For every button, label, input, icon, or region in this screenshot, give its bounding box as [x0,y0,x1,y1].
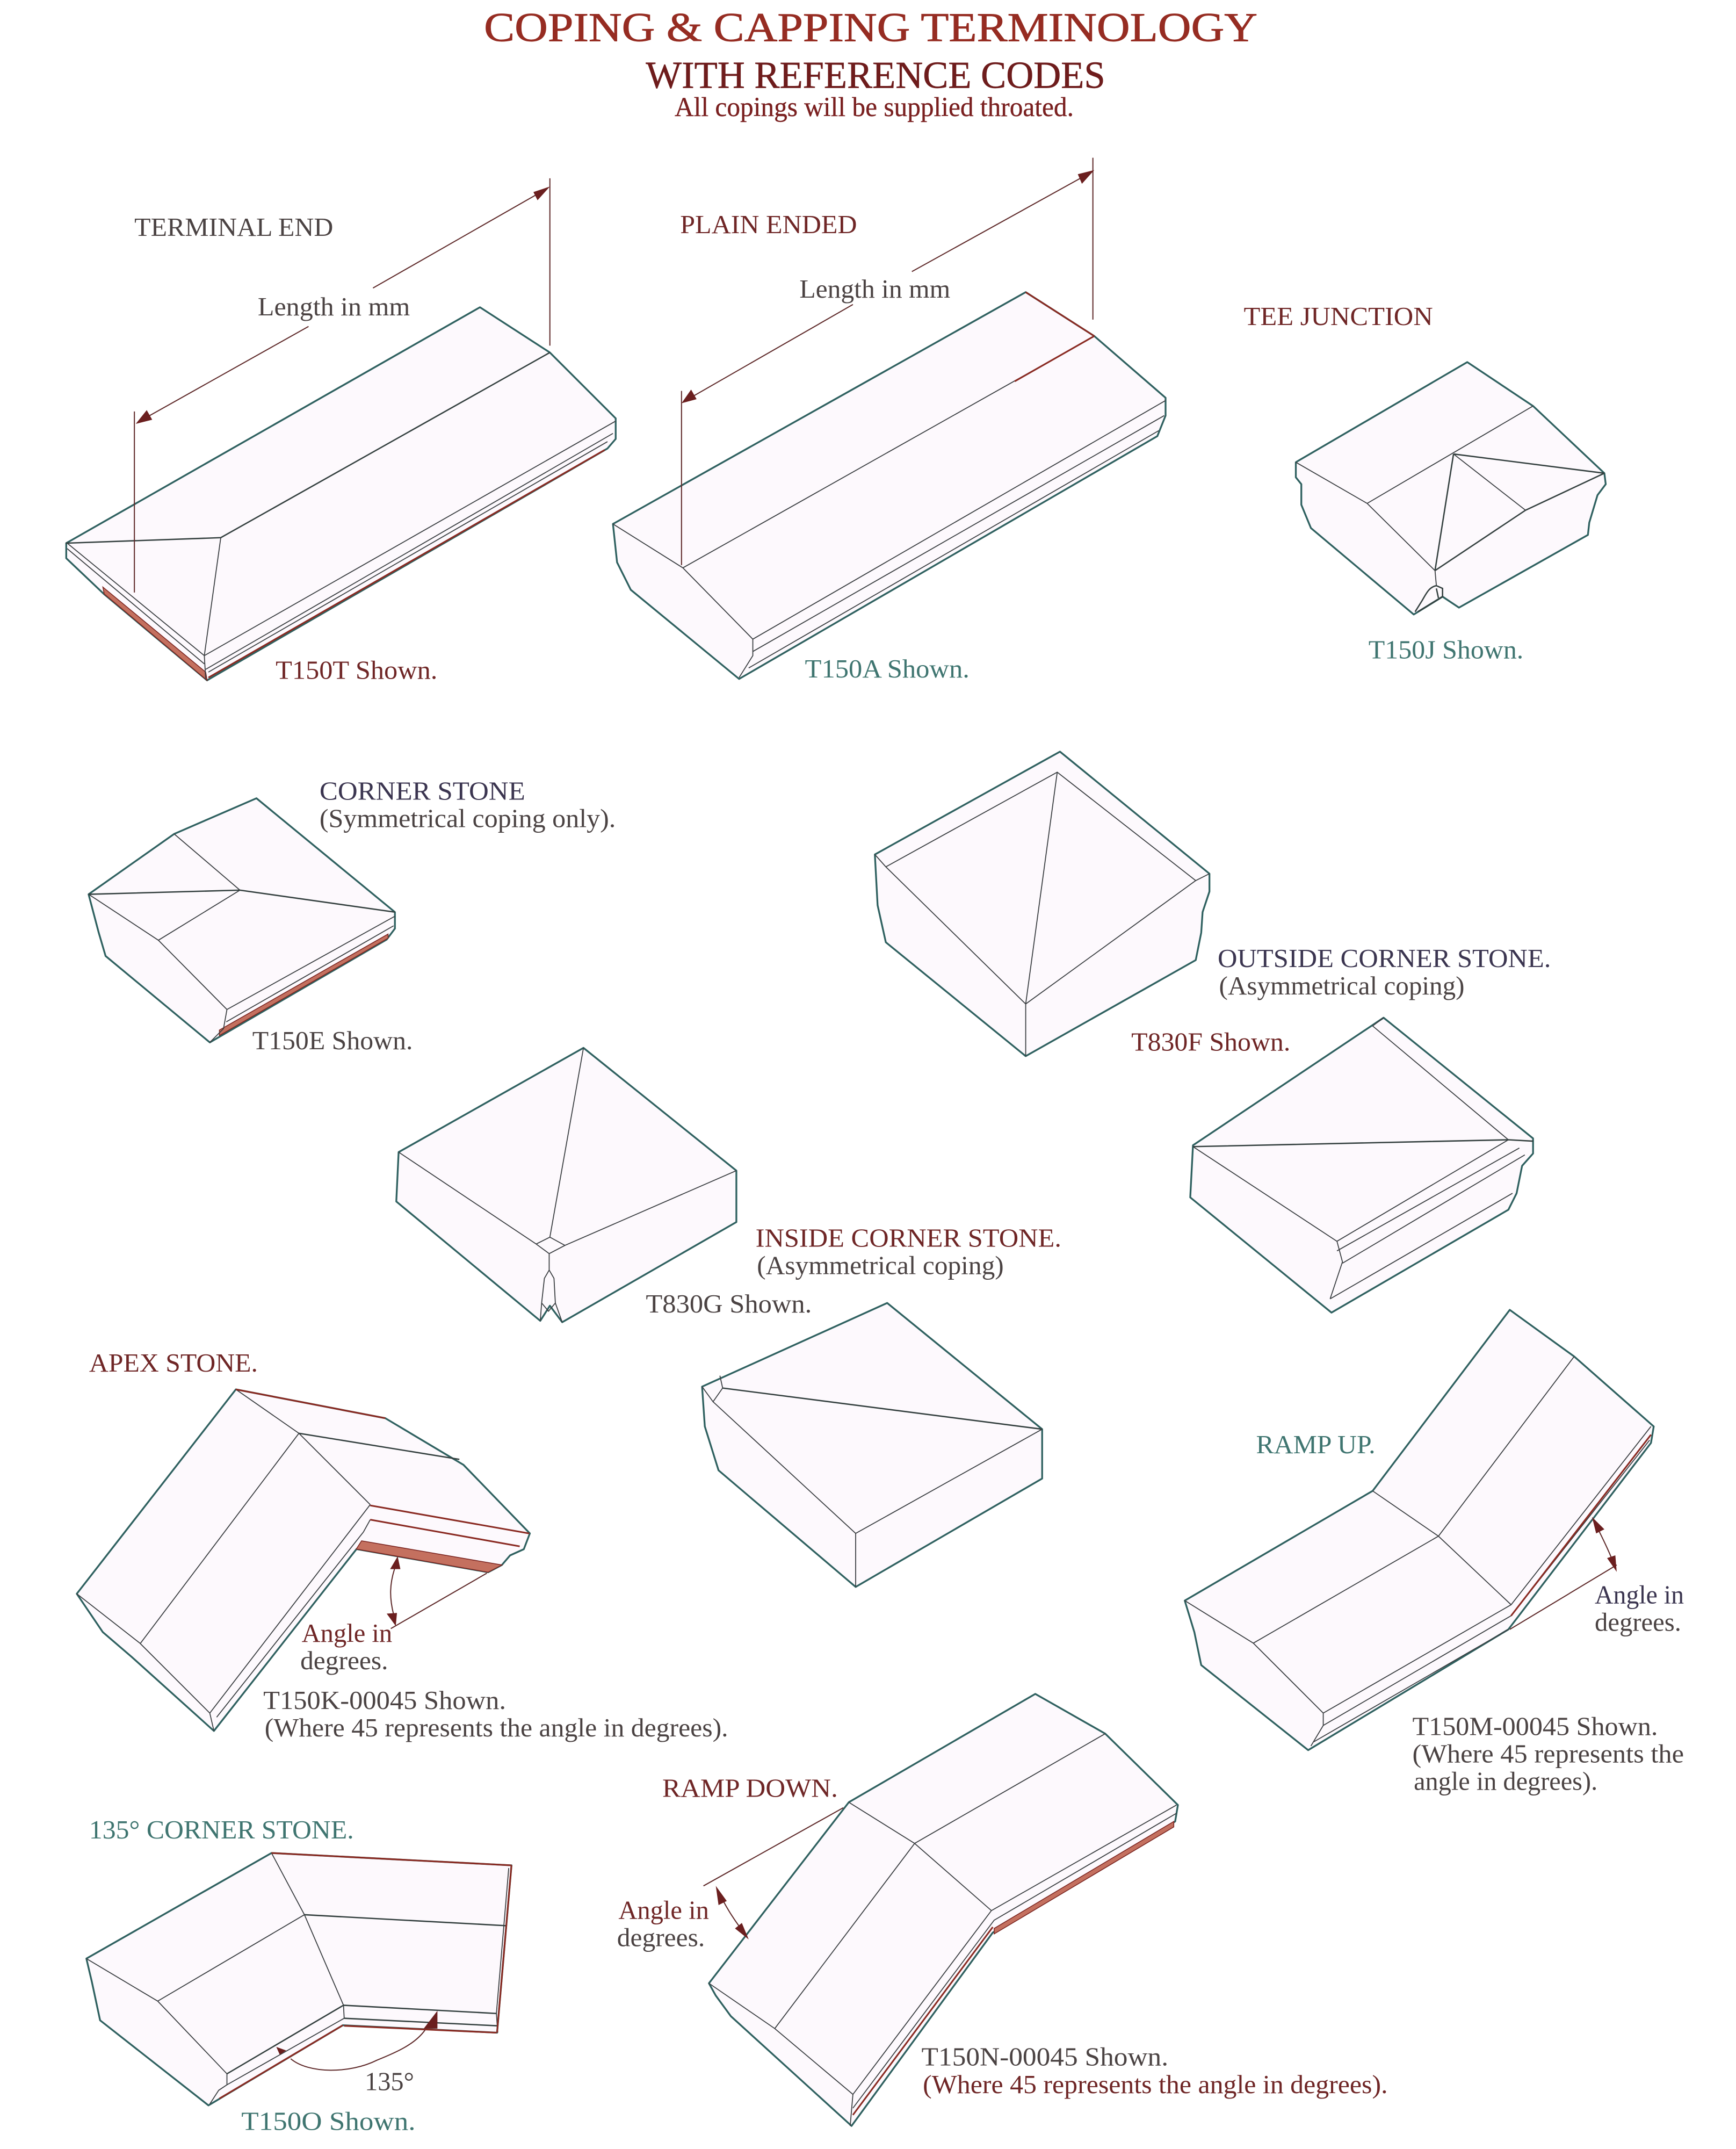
length label: Length in mm [799,275,950,304]
coping drawing [1185,1310,1654,1750]
angle dimension arrow [704,1808,843,1939]
coping drawing [613,292,1166,679]
heading: PLAIN ENDED [680,211,857,239]
reference code: T150O Shown. [241,2108,416,2136]
heading: CORNER STONE [320,777,525,805]
angle label, second line: degrees. [1595,1608,1681,1636]
reference code: T150K-00045 Shown. [263,1686,506,1715]
stone drawing, reverse view [1190,1018,1533,1313]
panel: terminal end [66,178,616,685]
angle label: Angle in [1595,1581,1684,1609]
panel: inside corner stone [396,1048,1061,1587]
coping drawing [77,1389,530,1731]
panel: apex stone [77,1349,728,1742]
angle arc with arrows [276,2011,437,2070]
heading: APEX STONE. [89,1349,258,1378]
reference code: T830F Shown. [1131,1028,1290,1057]
panel: ramp up [1185,1310,1684,1796]
title: COPING & CAPPING TERMINOLOGY [484,5,1257,51]
stone drawing with nosing [875,752,1210,1056]
subtitle: WITH REFERENCE CODES [646,54,1105,96]
angle label, second line: degrees. [617,1924,705,1952]
panel: ramp down [617,1694,1388,2126]
heading: RAMP DOWN. [662,1774,838,1802]
reference code: T150M-00045 Shown. [1413,1712,1658,1741]
note: All copings will be supplied throated. [675,92,1074,122]
note: (Symmetrical coping only). [320,804,616,833]
coping drawing [89,798,395,1042]
angle dimension arrow [1510,1517,1617,1629]
length dimension arrow [134,178,550,593]
heading: TEE JUNCTION [1244,302,1433,331]
title block [484,5,1257,122]
panel: 135 degree corner stone [86,1816,511,2136]
note: (Where 45 represents the angle in degrees). [265,1714,728,1742]
length label: Length in mm [258,293,410,321]
reference code: T150N-00045 Shown. [922,2043,1168,2072]
panel: plain ended [613,158,1166,683]
note: (Asymmetrical coping) [1219,972,1465,1000]
coping drawing [709,1694,1178,2126]
angle dimension arrow [387,1556,487,1628]
angle label: Angle in [618,1896,709,1925]
note, second line: angle in degrees). [1414,1768,1597,1796]
stone drawing, reverse view [702,1303,1042,1587]
coping drawing [1296,362,1605,615]
panel: outside corner stone [875,752,1551,1313]
note: (Asymmetrical coping) [757,1252,1004,1280]
stone drawing with throat [396,1048,736,1322]
length dimension arrow [682,158,1094,565]
angle label, second line: degrees. [300,1647,388,1675]
reference code: T830G Shown. [646,1290,812,1318]
heading: TERMINAL END [134,213,333,242]
panel: corner stone [89,777,616,1055]
reference code: T150J Shown. [1369,636,1523,664]
reference code: T150E Shown. [252,1027,413,1055]
panel: tee junction [1244,302,1605,664]
heading: OUTSIDE CORNER STONE. [1218,944,1551,973]
heading: RAMP UP. [1256,1431,1376,1459]
note: (Where 45 represents the angle in degrees). [923,2071,1388,2099]
coping drawing [86,1853,511,2105]
reference code: T150T Shown. [276,657,437,685]
note: (Where 45 represents the [1413,1740,1684,1769]
coping drawing [66,307,616,680]
heading: 135° CORNER STONE. [89,1816,354,1844]
reference code: T150A Shown. [805,655,970,683]
angle label: Angle in [302,1619,392,1648]
heading: INSIDE CORNER STONE. [756,1224,1061,1253]
angle label: 135° [365,2068,414,2096]
